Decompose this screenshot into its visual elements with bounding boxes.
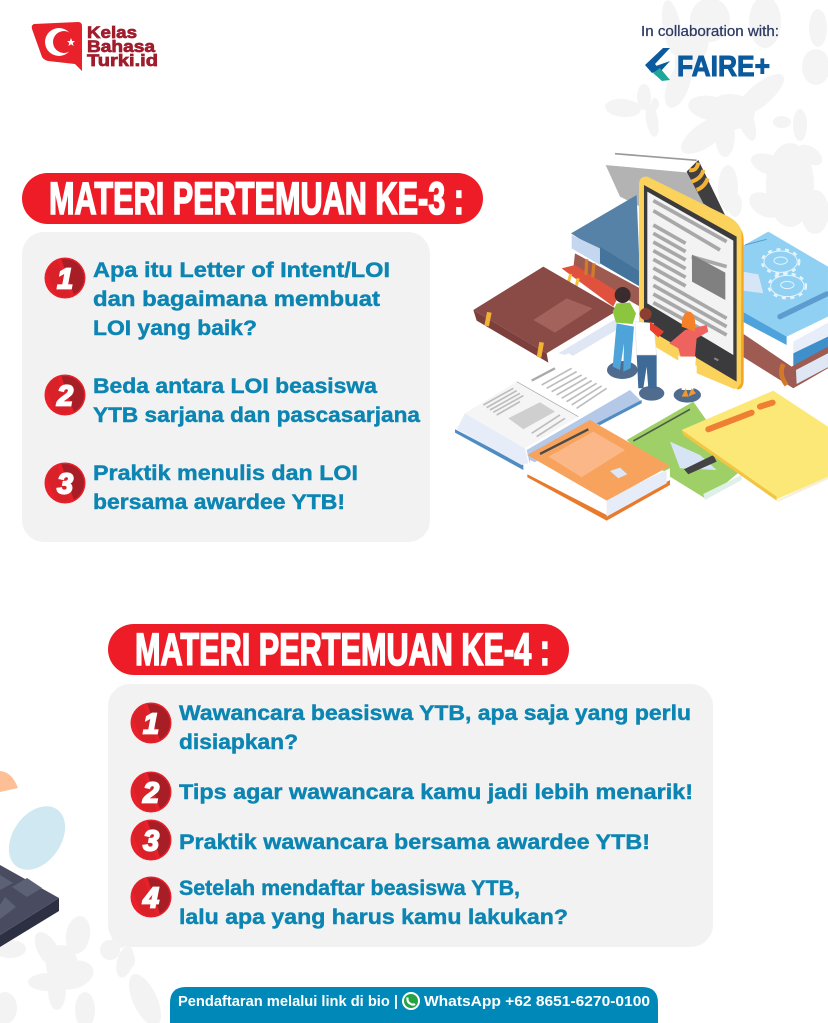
maroon book [473, 267, 618, 363]
readers [607, 287, 708, 403]
item 2 text: Beda antara LOI beasiswa [93, 374, 378, 398]
item 2 text [93, 374, 421, 427]
item 3 text [93, 461, 358, 514]
item 3 text: bersama awardee YTB! [93, 490, 345, 514]
light blue gear book [743, 232, 828, 370]
number 3 badge [44, 462, 86, 504]
red and brown books behind [562, 253, 640, 307]
item 4 text [179, 876, 568, 929]
item 4 text: lalu apa yang harus kamu lakukan? [179, 905, 568, 929]
decoration: peach shape [0, 771, 18, 792]
icon: whatsapp [402, 992, 420, 1010]
footer registration bar [170, 987, 658, 1023]
number 2 badge: 2 [142, 778, 159, 810]
FAIRE+ logo [645, 48, 770, 83]
collaboration label: In collaboration with: [641, 24, 779, 40]
item 1 text [179, 701, 691, 754]
blue large book [571, 195, 640, 287]
item 1 text [93, 258, 390, 340]
heading: materi pertemuan ke-4 [108, 624, 569, 675]
item 1 text: dan bagaimana membuat [93, 287, 380, 311]
logo wordmark: Bahasa [87, 38, 156, 56]
brown book under gear book [743, 333, 828, 388]
heading: materi pertemuan ke-4: MATERI PERTEMUAN KE-4 : [135, 624, 550, 675]
number 1 badge: 1 [57, 264, 73, 296]
panel: pertemuan ke-3 list [22, 232, 430, 542]
background coral bottom left [0, 914, 168, 1023]
item 1 text: LOI yang baik? [93, 316, 257, 340]
orange book [527, 420, 670, 521]
yellow book [682, 391, 828, 502]
footer registration bar: WhatsApp +62 8651-6270-0100 [424, 994, 650, 1010]
logo: Kelas Bahasa Turki.id [32, 22, 158, 71]
logo wordmark: Kelas [87, 24, 137, 42]
number 2 badge [44, 374, 86, 416]
tablet [639, 177, 744, 389]
item 4 text: Setelah mendaftar beasiswa YTB, [179, 876, 520, 900]
keyboard illustration [0, 865, 59, 947]
logo wordmark: Turki.id [87, 52, 158, 70]
footer registration bar: Pendaftaran melalui link di bio | [178, 994, 398, 1010]
heading: materi pertemuan ke-3: MATERI PERTEMUAN KE-3 : [49, 173, 464, 224]
number 2 badge: 2 [56, 380, 73, 412]
number 1 badge [44, 258, 86, 298]
number 4 badge [130, 876, 172, 918]
heading: materi pertemuan ke-3 [22, 173, 483, 224]
illustration: books and tablet with readers [455, 153, 828, 521]
number 4 badge: 4 [142, 882, 159, 914]
item 1 text: Apa itu Letter of Intent/LOI [93, 258, 390, 282]
item 1 text: Wawancara beasiswa YTB, apa saja yang perlu [179, 701, 691, 725]
logo speech bubble [32, 22, 82, 71]
number 3 badge: 3 [143, 826, 159, 858]
number 1 badge: 1 [143, 708, 159, 740]
item 3 text: Praktik menulis dan LOI [93, 461, 358, 485]
logo wordmark [87, 24, 158, 70]
number 2 badge [130, 772, 172, 812]
item 2 text: YTB sarjana dan pascasarjana [93, 403, 421, 427]
decoration: light blue leaf [0, 796, 77, 880]
item 2 text: Tips agar wawancara kamu jadi lebih menarik! [179, 780, 693, 804]
number 1 badge [130, 702, 172, 744]
grey standing book [606, 153, 727, 218]
item 1 text: disiapkan? [179, 730, 298, 754]
open book [455, 353, 642, 470]
green book [627, 402, 742, 500]
number 3 badge [130, 820, 172, 860]
panel: pertemuan ke-4 list [108, 684, 713, 947]
FAIRE+ logo: FAIRE+ [677, 51, 770, 83]
number 3 badge: 3 [57, 468, 73, 500]
background coral top right [604, 0, 828, 234]
item 3 text: Praktik wawancara bersama awardee YTB! [179, 830, 650, 854]
